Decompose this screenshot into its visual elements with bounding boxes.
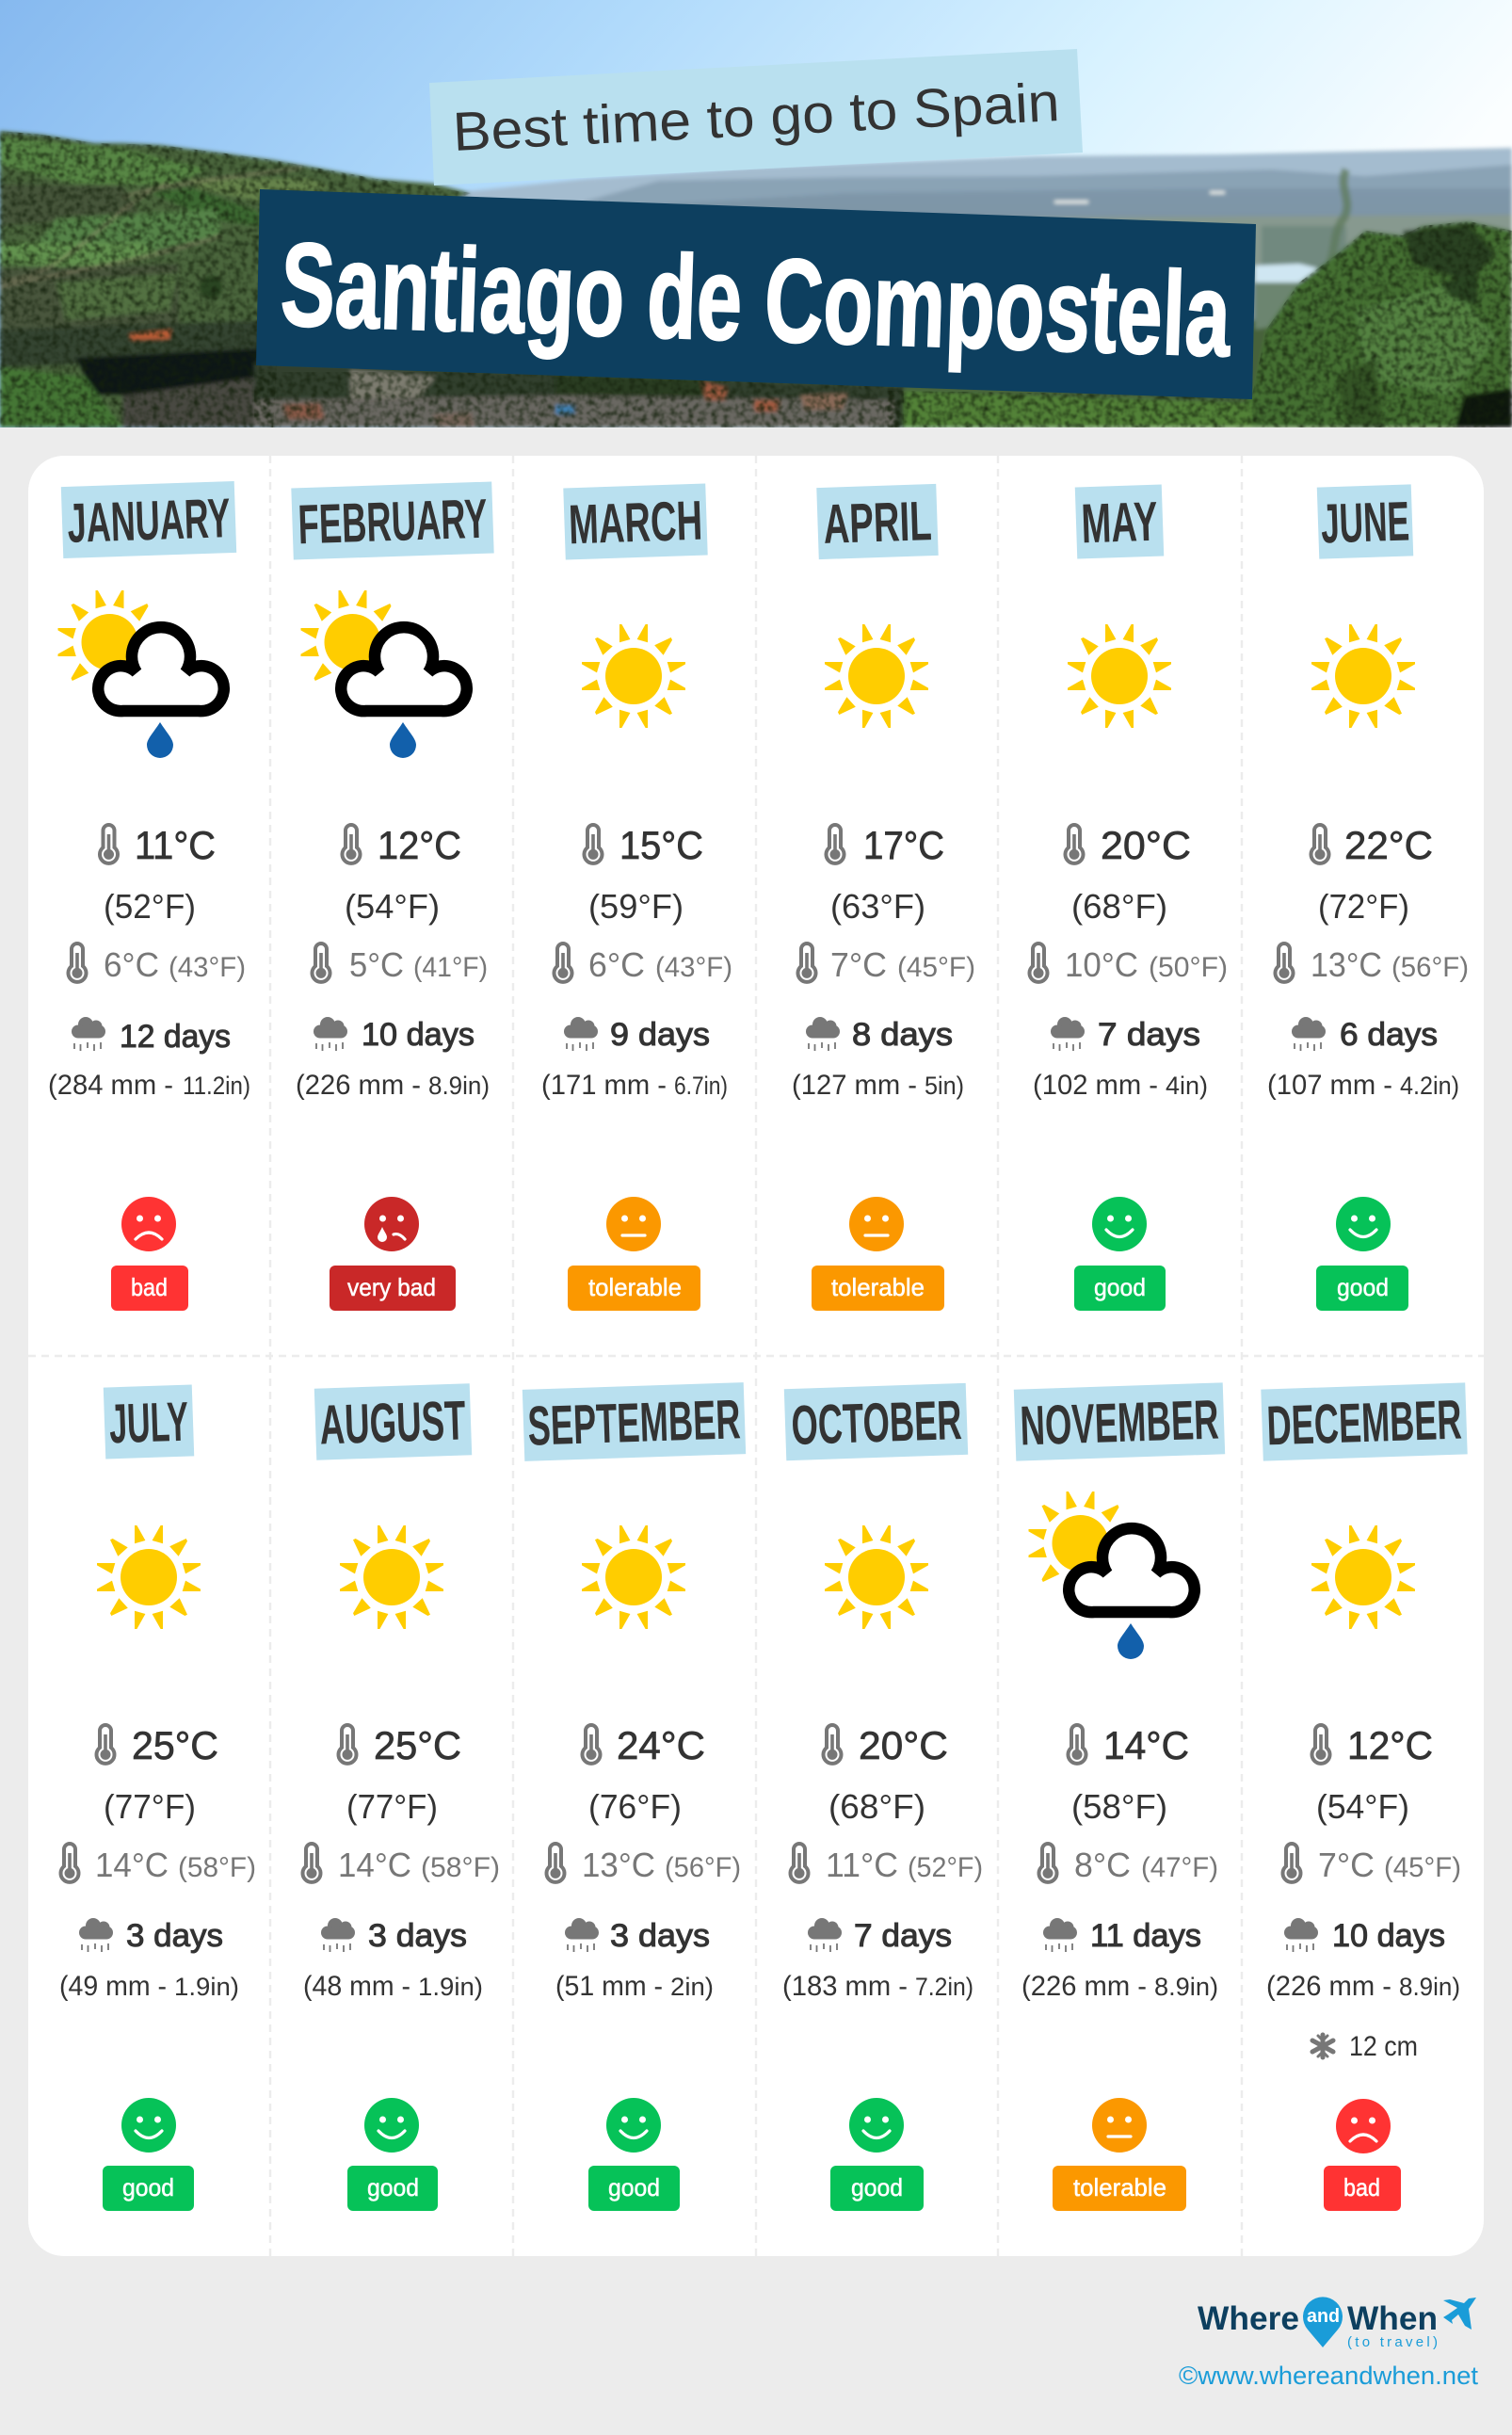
month label: June: JUNE [1320,490,1410,556]
rainfall: 4.2in) [1400,1072,1459,1100]
rainfall: (183 mm - [782,1971,908,2002]
low temperature [1039,1844,1218,1884]
high temperature: 25°C [374,1723,461,1767]
low temperature [1030,943,1228,984]
icon: sun, cloud and rain [301,590,467,758]
rainfall: (127 mm - [792,1070,917,1101]
month label: May [1075,484,1164,559]
high temperature [96,1723,218,1826]
rain days [808,1918,952,1954]
panel: November [1014,1382,1225,2211]
rain days: 3 days [368,1918,467,1954]
rain days [72,1017,231,1055]
rating: tolerable: tolerable [588,1273,682,1301]
subtitle banner [429,49,1083,185]
high temperature [582,1723,705,1826]
rain days [565,1918,710,1954]
high temperature: 12°C [378,823,461,867]
high temperature: 12°C [1347,1723,1433,1767]
rainfall: 7.2in) [915,1973,973,2001]
low temperature: (52°F) [908,1852,983,1883]
high temperature: (63°F) [830,887,925,926]
high temperature: 22°C [1344,823,1433,867]
white calendar card [28,456,1484,2256]
icon: sun [582,1525,685,1629]
low temperature: (41°F) [413,952,488,983]
icon: sun [582,624,685,728]
rating: tolerable [1053,2098,1186,2211]
rating: good [1074,1197,1166,1311]
rainfall: 1.9in) [418,1973,483,2001]
low temperature: (45°F) [1384,1852,1461,1883]
rating: very bad: very bad [347,1273,436,1301]
low temperature: 13°C [582,1846,655,1884]
icon: map pin [1303,2297,1343,2347]
rating: good [103,2098,194,2211]
low temperature [1275,943,1469,984]
panel: March [541,484,732,1311]
rainfall: (102 mm - [1033,1070,1158,1101]
month label: March: MARCH [568,490,703,556]
rainfall: 2in) [670,1973,714,2001]
high temperature: (68°F) [828,1787,925,1826]
low temperature: (56°F) [1391,952,1469,983]
logo: Where and When to travel: Where [1198,2300,1299,2337]
rain days [806,1017,953,1053]
rain days: 8 days [852,1017,953,1053]
icon: sun, cloud and rain [1028,1492,1195,1659]
rainfall: (171 mm - [541,1070,667,1101]
low temperature [791,1844,983,1884]
rating: tolerable [812,1197,944,1311]
logo: Where and When to travel: and [1307,2306,1340,2327]
rainfall: (107 mm - [1267,1070,1392,1101]
icon: sun [340,1525,443,1629]
rain days: 9 days [610,1017,710,1053]
month label: October [784,1383,968,1460]
rainfall: 8.9in) [428,1072,490,1100]
website credit: ©www.whereandwhen.net [1179,2362,1478,2390]
rating: good [588,2098,680,2211]
high temperature: 24°C [617,1723,705,1767]
logo: Where and When to travel [1198,2297,1476,2350]
rainfall [1021,1971,1218,2002]
high temperature [100,823,216,926]
month label: June [1317,484,1413,559]
rainfall: 4in) [1166,1072,1208,1100]
rain days [321,1918,467,1954]
low temperature: (56°F) [665,1852,741,1883]
month label: January [61,481,236,558]
high temperature: (68°F) [1071,887,1167,926]
high temperature [343,823,461,926]
rainfall [1266,1971,1460,2002]
rating: tolerable: tolerable [1073,2173,1166,2201]
low temperature: (58°F) [421,1852,500,1883]
panel: February [291,481,494,1311]
header photo: vineyard hills and valley [0,0,1512,427]
low temperature: 14°C [95,1846,169,1884]
rating: good [347,2098,438,2211]
icon: sun, cloud and rain [58,590,224,758]
month label: August [314,1383,472,1460]
month label: May: MAY [1080,491,1159,555]
high temperature [1312,1723,1433,1826]
high temperature: 15°C [619,823,703,867]
rainfall [296,1070,490,1101]
rainfall: (51 mm - [555,1971,663,2002]
rainfall [303,1971,483,2002]
rain days [1284,1918,1445,1954]
low temperature [1282,1844,1461,1884]
rain days: 3 days [610,1918,710,1954]
month label: July: JULY [108,1391,189,1455]
rain days: 7 days [854,1918,952,1954]
high temperature: 20°C [859,1723,948,1767]
rain days: 11 days [1090,1918,1201,1954]
rainfall: 11.2in) [183,1072,250,1100]
rating: good: good [122,2173,174,2201]
low temperature [554,943,732,984]
panel: April [792,484,975,1311]
title banner [256,189,1256,399]
rainfall [59,1971,239,2002]
high temperature: (77°F) [104,1787,196,1826]
rainfall: (226 mm - [296,1070,421,1101]
month label: February: FEBRUARY [297,488,489,556]
low temperature: (43°F) [169,952,246,983]
panel: December [1261,1382,1468,2211]
high temperature: (77°F) [346,1787,438,1826]
rating: good: good [367,2173,419,2201]
high temperature [827,823,944,926]
rainfall: 1.9in) [174,1973,239,2001]
rain days [1292,1017,1438,1053]
icon: sun [1311,1525,1415,1629]
month label: April [816,484,939,559]
icon: sun [1068,624,1171,728]
rain days [79,1918,223,1954]
month label: January: JANUARY [66,487,232,555]
rain days: 10 days [1332,1918,1445,1954]
high temperature: 20°C [1101,823,1191,867]
panel: August [303,1383,500,2211]
rain days [1051,1017,1200,1053]
high temperature [584,823,703,926]
high temperature: (58°F) [1071,1787,1167,1826]
rating: tolerable: tolerable [831,1273,925,1301]
panel: September [523,1382,746,2211]
icon: sun [825,1525,928,1629]
low temperature [303,1844,500,1884]
low temperature: (47°F) [1141,1852,1218,1883]
low temperature: 14°C [338,1846,411,1884]
high temperature: (72°F) [1318,887,1409,926]
high temperature: (76°F) [588,1787,682,1826]
low temperature [798,943,975,984]
rainfall: 6.7in) [674,1072,728,1100]
rating: tolerable [568,1197,700,1311]
rainfall [1267,1070,1459,1101]
rating: bad: bad [131,1273,168,1301]
panel: October [782,1383,983,2211]
rainfall: (49 mm - [59,1971,167,2002]
rating: bad [1324,2099,1401,2211]
high temperature [339,1723,461,1826]
low temperature: 10°C [1065,945,1138,984]
low temperature [68,943,246,984]
month label: April: APRIL [822,490,933,556]
snowfall [1312,2031,1418,2062]
high temperature: 25°C [132,1723,218,1767]
logo: Where and When to travel: When [1347,2300,1438,2337]
high temperature: (54°F) [1316,1787,1409,1826]
low temperature [546,1844,741,1884]
month label: September: SEPTEMBER [527,1388,742,1458]
low temperature: (58°F) [178,1852,256,1883]
low temperature: 8°C [1074,1846,1131,1884]
panel: June [1267,484,1469,1311]
high temperature: 14°C [1103,1723,1189,1767]
rating: good: good [851,2173,903,2201]
low temperature: 6°C [104,945,159,984]
low temperature: 5°C [349,945,404,984]
month label: August: AUGUST [318,1389,467,1457]
rating: good: good [1094,1273,1146,1301]
rainfall: 8.9in) [1399,1973,1460,2001]
snowfall: 12 cm [1349,2031,1418,2062]
icon: airplane [1443,2298,1476,2330]
rain days: 3 days [126,1918,223,1954]
rating: good [830,2098,924,2211]
panel: July [59,1384,256,2211]
low temperature: (50°F) [1149,952,1228,983]
rating: good: good [1337,1273,1389,1301]
rain days: 12 days [120,1019,231,1055]
rating: good [1316,1197,1408,1311]
rating: good: good [608,2173,660,2201]
logo: Where and When to travel: (to travel) [1347,2334,1438,2350]
rainfall [48,1070,250,1101]
low temperature: 6°C [588,945,645,984]
low temperature: (43°F) [655,952,732,983]
high temperature [1066,823,1191,926]
rain days [314,1017,475,1053]
panel: May [1030,484,1228,1311]
high temperature [1311,823,1433,926]
high temperature [823,1723,948,1826]
rain days: 6 days [1340,1017,1438,1053]
high temperature [1068,1723,1189,1826]
rainfall: (226 mm - [1266,1971,1391,2002]
low temperature: 7°C [1318,1846,1375,1884]
month label: September [523,1382,746,1461]
low temperature [60,1844,256,1884]
high temperature: 17°C [863,823,944,867]
high temperature: (59°F) [588,887,684,926]
month label: November [1014,1382,1225,1461]
icon: sun [1311,624,1415,728]
high temperature: 11°C [135,823,216,867]
high temperature: (54°F) [345,887,440,926]
low temperature: 11°C [826,1846,898,1884]
low temperature: 7°C [830,945,887,984]
rating: bad: bad [1343,2173,1380,2201]
rainfall [541,1070,728,1101]
rainfall: 5in) [925,1072,964,1100]
rain days: 7 days [1098,1017,1200,1053]
month label: March [563,484,708,559]
panel: January [48,481,250,1311]
rating: very bad [330,1197,456,1311]
rainfall: (226 mm - [1021,1971,1147,2002]
rainfall: (284 mm - [48,1070,173,1101]
subtitle text: Best time to go to Spain [451,72,1061,163]
low temperature [313,943,488,984]
low temperature: (45°F) [897,952,975,983]
rainfall [782,1971,973,2002]
icon: sun [825,624,928,728]
rain days: 10 days [362,1017,475,1053]
month label: November: NOVEMBER [1019,1389,1220,1457]
month label: July [104,1384,194,1459]
high temperature: (52°F) [104,887,196,926]
rain days [1043,1918,1201,1954]
rainfall: (48 mm - [303,1971,410,2002]
rainfall: 8.9in) [1154,1973,1218,2001]
month label: February [291,481,494,560]
low temperature: 13°C [1311,945,1382,984]
rating: bad [111,1197,188,1311]
month label: October: OCTOBER [790,1389,963,1457]
rain days [564,1017,710,1053]
icon: sun [97,1525,201,1629]
